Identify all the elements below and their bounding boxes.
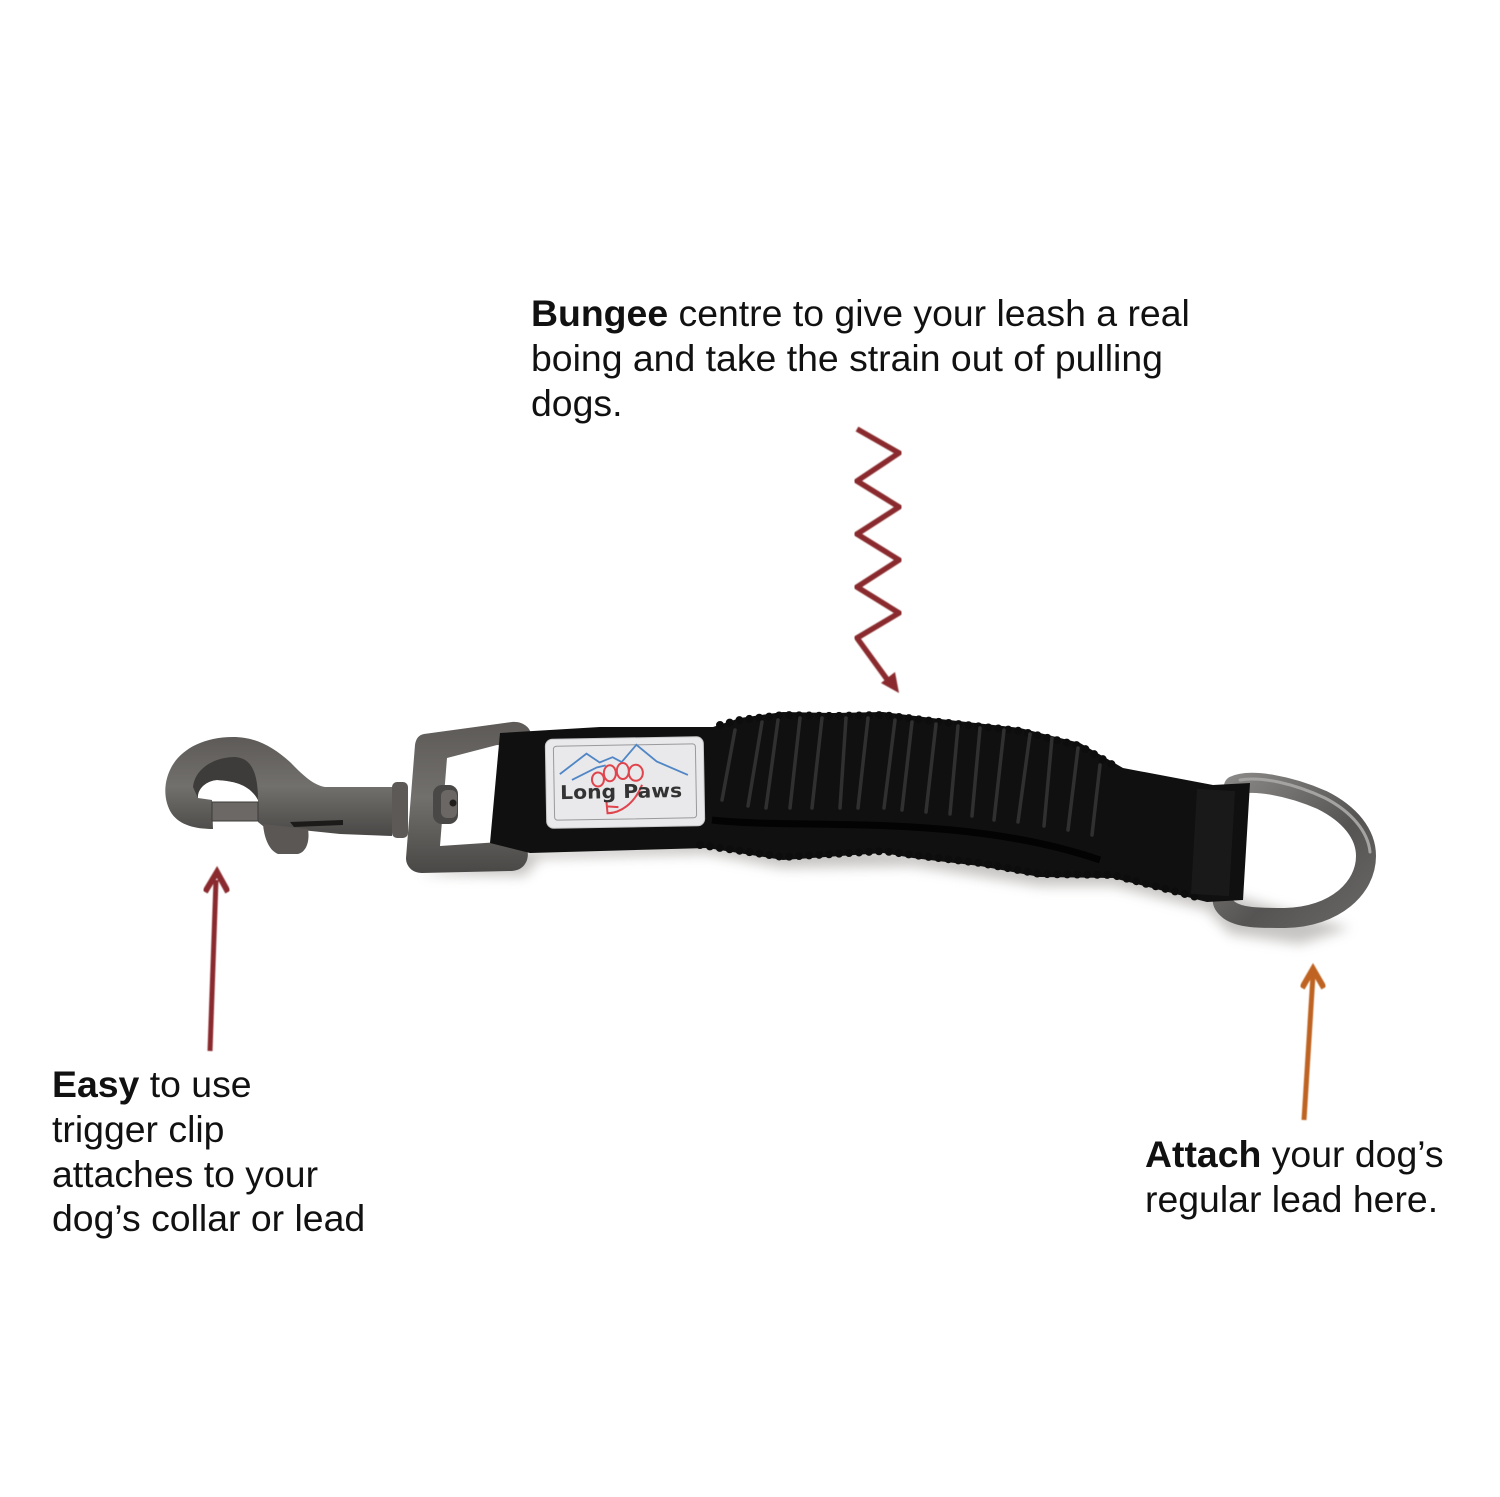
pivot bolt: [433, 785, 458, 824]
product: bungee connector: [165, 712, 1370, 944]
product shadow: [420, 840, 1350, 944]
bolt washer: [433, 785, 458, 824]
bungee fold shadow: [712, 820, 1100, 860]
text: attach callout: regular lead here.: [1145, 1178, 1438, 1220]
text: attach callout: Attach your dog’s: [1145, 1133, 1444, 1175]
arrow: lead attachment arrow: [1302, 969, 1324, 1120]
ring highlight: [1240, 779, 1370, 852]
trigger thumb slide: [263, 824, 309, 854]
bolt head: [441, 790, 457, 818]
scalloped fabric edges: [700, 715, 1200, 898]
text: easy callout: trigger clip: [52, 1108, 224, 1150]
swivel collar: [392, 782, 408, 838]
trigger slot: [290, 820, 343, 827]
hook gate pin: [212, 802, 258, 821]
text: easy callout: Easy to use: [52, 1063, 252, 1105]
patch base: [545, 737, 705, 828]
paw pad: [606, 785, 643, 813]
snap hook body: [165, 737, 392, 836]
ring body: [1223, 783, 1366, 918]
text: bungee callout: boing and take the strain out of pulling: [531, 337, 1163, 379]
arrow: trigger clip arrow: [205, 872, 228, 1051]
paw: [592, 763, 644, 814]
top edge scallop: [720, 715, 1118, 768]
paw toes: [592, 763, 643, 787]
text: bungee callout: Bungee centre to give your leash a real: [531, 292, 1190, 334]
bottom edge scallop: [700, 845, 1200, 898]
hook inner rim: [193, 757, 258, 800]
arrow: zigzag bungee arrow: [857, 429, 899, 693]
bolt socket: [450, 800, 456, 806]
text: bungee callout: dogs.: [531, 382, 622, 424]
stitched webbing end: [1210, 790, 1216, 895]
mountains: [559, 744, 688, 780]
brand name: Long Paws: [560, 780, 682, 804]
text: easy callout: attaches to your: [52, 1153, 318, 1195]
webbing and bungee body: [490, 712, 1250, 902]
D-ring: [1223, 779, 1370, 918]
text: easy callout: dog’s collar or lead: [52, 1197, 365, 1239]
swivel bracket: [406, 722, 531, 873]
bungee ribs: [722, 718, 1100, 835]
logo patch: [545, 737, 705, 828]
patch stitching: [553, 744, 697, 820]
